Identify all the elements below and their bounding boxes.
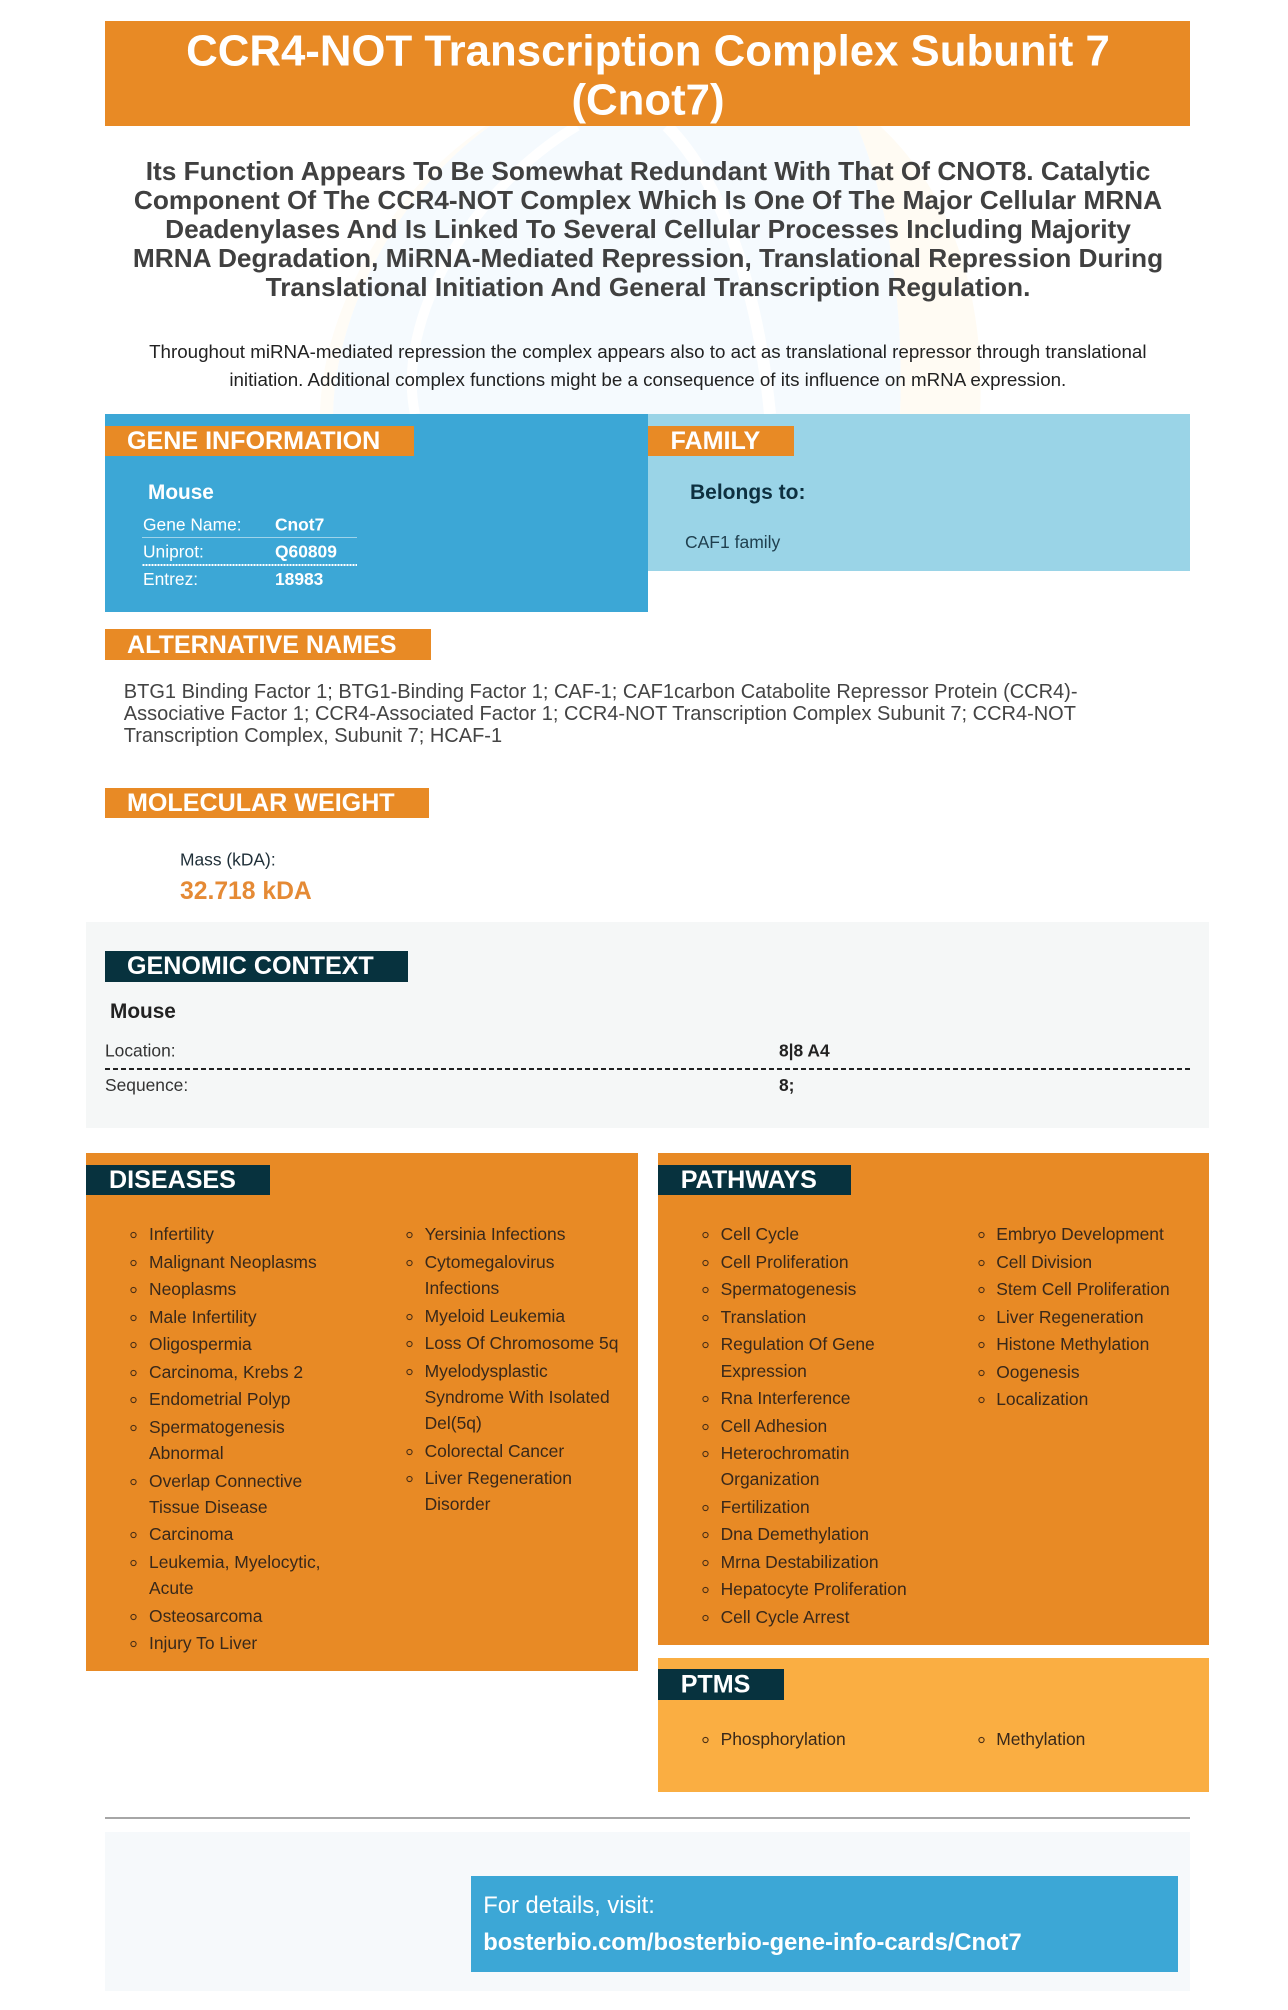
list: pathways column 1: Organization (721, 1469, 819, 1489)
list: ptms: Phosphorylation (721, 1729, 846, 1749)
list: pathways column 1: Fertilization (721, 1497, 810, 1517)
panel: diseases (86, 1153, 638, 1671)
title banner: CCR4-NOT Transcription Complex Subunit 7 (186, 26, 1110, 76)
list: pathways column 1: Cell Cycle Arrest (721, 1607, 850, 1627)
list: pathways column 2: Histone Methylation (996, 1334, 1149, 1354)
function summary heading: MRNA Degradation, MiRNA-Mediated Repression, Translational Repression During (133, 243, 1163, 273)
list: pathways column 1: Expression (721, 1361, 807, 1381)
genomic table (105, 1040, 1190, 1095)
heading: gene information: GENE INFORMATION (127, 427, 380, 455)
list: diseases column 1: Endometrial Polyp (149, 1389, 291, 1409)
list: diseases column 1: Abnormal (149, 1443, 224, 1463)
species label: Mouse (110, 1000, 176, 1023)
list: pathways column 1: Mrna Destabilization (721, 1552, 879, 1572)
genomic table: Location: (105, 1040, 176, 1060)
list: pathways column 2: Oogenesis (996, 1362, 1080, 1382)
list: pathways column 2: Stem Cell Proliferation (996, 1279, 1170, 1299)
list: pathways column 2: Localization (996, 1389, 1088, 1409)
molecular weight value: 32.718 kDA (180, 878, 312, 905)
molecular weight value (180, 850, 312, 905)
function summary heading: Its Function Appears To Be Somewhat Redundant With That Of CNOT8. Catalytic (146, 156, 1150, 186)
list: pathways column 1: Hepatocyte Proliferation (721, 1579, 907, 1599)
panel: family (648, 414, 1190, 571)
genomic table: 8; (779, 1075, 794, 1095)
list: pathways column 1: Regulation Of Gene (721, 1334, 875, 1354)
heading: family (648, 426, 794, 456)
list: diseases column 1: Injury To Liver (149, 1633, 257, 1653)
list: diseases column 1: Male Infertility (149, 1307, 257, 1327)
list: pathways column 2: Liver Regeneration (996, 1307, 1144, 1327)
description paragraph (149, 341, 1147, 390)
heading: ptms (658, 1669, 784, 1700)
callout: details link (471, 1876, 1178, 1972)
list: diseases column 1: Leukemia, Myelocytic, (149, 1552, 321, 1572)
gene info table: Entrez: (143, 569, 198, 589)
list: diseases column 2: Myelodysplastic (425, 1361, 548, 1381)
gene info table: Q60809 (275, 542, 337, 562)
heading: alternative names: ALTERNATIVE NAMES (127, 631, 397, 659)
callout: details link: bosterbio.com/bosterbio-gene-info-cards/Cnot7 (483, 1929, 1022, 1956)
list: diseases column 2: Del(5q) (425, 1413, 482, 1433)
list: diseases column 1: Tissue Disease (149, 1497, 268, 1517)
list: diseases column 2: Infections (425, 1278, 500, 1298)
list: diseases column 1: Carcinoma (149, 1524, 234, 1544)
list: diseases column 1: Osteosarcoma (149, 1606, 263, 1626)
list: diseases column 1: Oligospermia (149, 1334, 252, 1354)
list: diseases column 1: Spermatogenesis (149, 1417, 285, 1437)
heading: diseases (86, 1165, 270, 1195)
panel: pathways (658, 1153, 1209, 1645)
gene info table: Uniprot: (143, 542, 204, 562)
panel: footer (105, 1832, 1190, 1991)
list: diseases column 2: Liver Regeneration (425, 1468, 572, 1488)
list: diseases column 1 (131, 1224, 321, 1653)
list: pathways column 2 (979, 1224, 1170, 1409)
callout: details link: For details, visit: (483, 1892, 655, 1919)
list: ptms: Methylation (996, 1729, 1085, 1749)
list: diseases column 2: Loss Of Chromosome 5q (425, 1333, 618, 1353)
list: pathways column 1: Cell Adhesion (721, 1416, 827, 1436)
gene info table: Cnot7 (275, 514, 324, 534)
list: pathways column 1: Cell Cycle (721, 1224, 799, 1244)
description paragraph: initiation. Additional complex functions might be a consequence of its influence on mRNA expression. (229, 369, 1066, 390)
list: pathways column 1: Heterochromatin (721, 1443, 850, 1463)
gene info table (142, 514, 357, 589)
heading: molecular weight: MOLECULAR WEIGHT (127, 789, 395, 817)
list: diseases column 2 (407, 1224, 618, 1514)
gene info table: 18983 (275, 569, 324, 589)
list: diseases column 2: Myeloid Leukemia (425, 1306, 565, 1326)
function summary heading: Component Of The CCR4-NOT Complex Which Is One Of The Major Cellular MRNA (134, 185, 1162, 215)
list: diseases column 1: Malignant Neoplasms (149, 1252, 317, 1272)
heading: family: FAMILY (670, 427, 760, 455)
list: pathways column 1 (703, 1224, 907, 1627)
species label: Mouse (148, 481, 214, 504)
list: diseases column 2: Yersinia Infections (425, 1224, 566, 1244)
list: pathways column 1: Cell Proliferation (721, 1252, 849, 1272)
heading: ptms: PTMS (681, 1670, 750, 1698)
title banner: (Cnot7) (571, 76, 725, 124)
watermark logo (320, 126, 981, 414)
belongs to label: Belongs to: (690, 481, 806, 504)
alternative names text (124, 681, 1078, 747)
list: diseases column 1: Acute (149, 1578, 194, 1598)
gene info table: Gene Name: (143, 514, 242, 534)
function summary heading: Translational Initiation And General Transcription Regulation. (266, 272, 1030, 302)
function summary heading: Deadenylases And Is Linked To Several Cellular Processes Including Majority (165, 214, 1131, 244)
list: diseases column 1: Infertility (149, 1224, 214, 1244)
title banner (105, 21, 1190, 126)
function summary heading (133, 156, 1163, 302)
heading: genomic context: GENOMIC CONTEXT (127, 952, 374, 980)
list: pathways column 1: Translation (721, 1307, 806, 1327)
molecular weight value: Mass (kDA): (180, 850, 276, 870)
panel: gene information (105, 414, 648, 612)
genomic table: Sequence: (105, 1075, 188, 1095)
list: diseases column 1: Carcinoma, Krebs 2 (149, 1362, 303, 1382)
list: diseases column 2: Cytomegalovirus (425, 1252, 555, 1272)
alternative names text: BTG1 Binding Factor 1; BTG1-Binding Factor 1; CAF-1; CAF1carbon Catabolite Repressor Protein (CCR4)- (124, 681, 1078, 703)
list: diseases column 2: Disorder (425, 1494, 491, 1514)
list: pathways column 2: Cell Division (996, 1252, 1092, 1272)
panel: genomic context (86, 922, 1209, 1128)
list: pathways column 1: Spermatogenesis (721, 1279, 857, 1299)
panel: ptms (658, 1658, 1209, 1792)
alternative names text: Associative Factor 1; CCR4-Associated Factor 1; CCR4-NOT Transcription Complex Subunit 7; CCR4-NOT (124, 703, 1076, 725)
list: pathways column 1: Rna Interference (721, 1388, 850, 1408)
list: ptms (703, 1729, 1085, 1749)
list: pathways column 2: Embryo Development (996, 1224, 1164, 1244)
list: pathways column 1: Dna Demethylation (721, 1524, 869, 1544)
heading: pathways (658, 1165, 851, 1195)
genomic table: 8|8 A4 (779, 1040, 830, 1060)
alternative names text: Transcription Complex, Subunit 7; HCAF-1 (124, 725, 502, 747)
list: diseases column 2: Colorectal Cancer (425, 1441, 564, 1461)
family value: CAF1 family (685, 532, 781, 552)
list: diseases column 1: Neoplasms (149, 1279, 237, 1299)
description paragraph: Throughout miRNA-mediated repression the complex appears also to act as translational repressor through translational (149, 341, 1147, 362)
heading: diseases: DISEASES (109, 1166, 236, 1194)
list: diseases column 1: Overlap Connective (149, 1471, 302, 1491)
list: diseases column 2: Syndrome With Isolated (425, 1387, 610, 1407)
heading: pathways: PATHWAYS (681, 1166, 817, 1194)
